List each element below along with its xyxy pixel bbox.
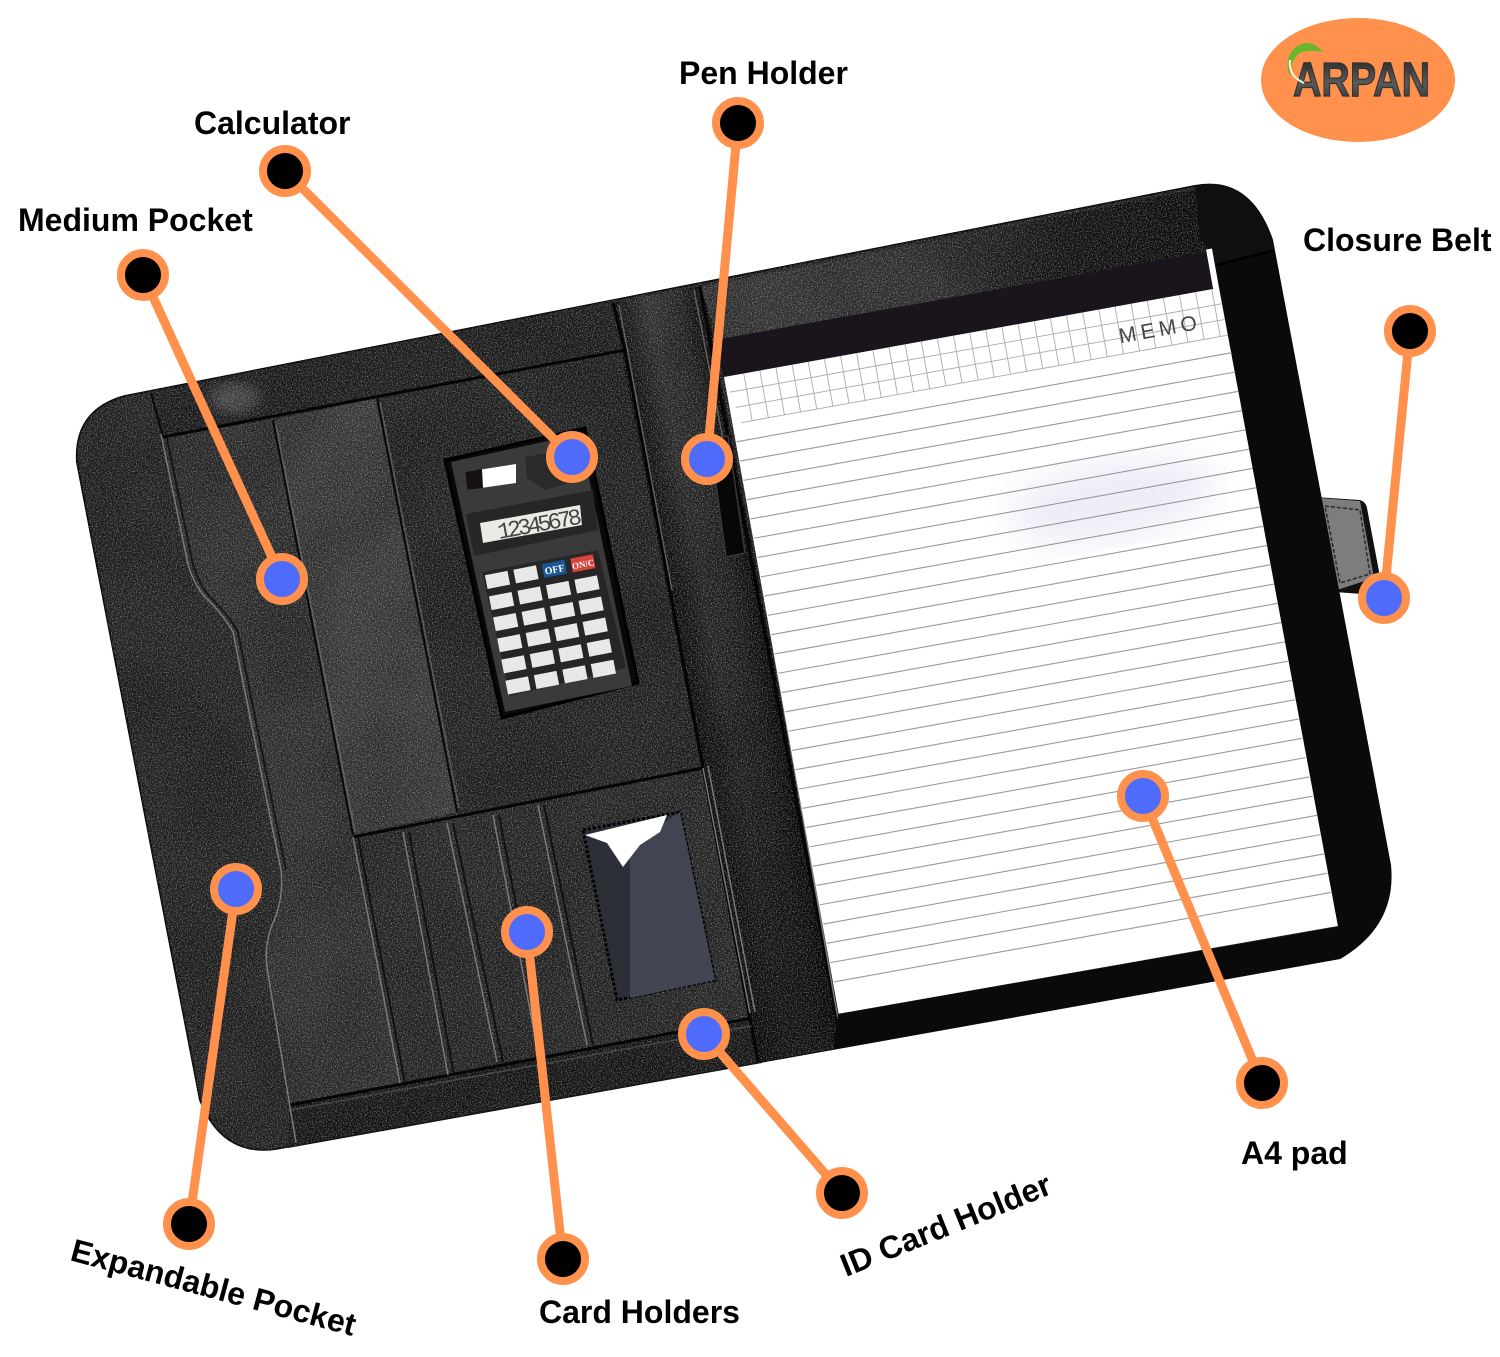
- logo wordmark: ARPAN: [1293, 54, 1430, 107]
- smudge: [1002, 442, 1222, 558]
- closure belt tab: [1315, 497, 1381, 594]
- callout: expandable pocket: [67, 867, 360, 1343]
- label: closure belt: Closure Belt: [1303, 222, 1492, 258]
- medium pocket panel: [273, 398, 457, 835]
- sheet: [724, 287, 1338, 1016]
- right page border: [830, 170, 1410, 1075]
- top band of right page: [700, 186, 1217, 346]
- label: pen holder: Pen Holder: [679, 55, 848, 91]
- off key: OFF: [544, 563, 566, 578]
- white sliver: [1206, 249, 1219, 289]
- lower strip: [288, 1018, 762, 1148]
- callout: medium pocket: [18, 202, 304, 601]
- label: expandable pocket: Expandable Pocket: [67, 1232, 360, 1343]
- display bezel: [466, 490, 598, 556]
- LCD display: 12345678: [496, 505, 583, 546]
- strip highlight: [209, 383, 261, 413]
- corner panel above belt seam: [1196, 185, 1210, 248]
- logo leaf: [1288, 43, 1323, 83]
- card holders panel: [353, 768, 752, 1083]
- off key: [542, 560, 567, 578]
- label: card holders: Card Holders: [539, 1294, 740, 1330]
- callout: card holders: [505, 910, 740, 1330]
- callout: closure belt: [1303, 222, 1492, 620]
- callout: pen holder: [679, 55, 848, 481]
- spine shading: [612, 285, 845, 1062]
- label: medium pocket: Medium Pocket: [18, 202, 253, 238]
- solar cell: [465, 464, 516, 490]
- callout: calculator: [194, 105, 594, 479]
- portfolio folder: [70, 170, 1410, 1170]
- calculator pocket panel: [377, 350, 703, 812]
- keypad: [485, 554, 616, 694]
- seams and stitching: [151, 287, 842, 1143]
- keypad background: [482, 550, 626, 696]
- callout: A4 pad: [1121, 774, 1348, 1171]
- ruled lines: [737, 352, 1331, 982]
- left page panels: [150, 285, 845, 1148]
- calculator: [445, 428, 638, 718]
- folder outer leather shell: [77, 185, 1391, 1150]
- pen holder: [710, 436, 745, 557]
- logo: [1261, 18, 1455, 142]
- A4 memo pad: [716, 248, 1338, 1016]
- calculator stitched surround: [445, 428, 638, 718]
- label: A4 pad: A4 pad: [1241, 1135, 1348, 1171]
- top binding strip: [150, 302, 625, 437]
- battery cover: [525, 450, 585, 490]
- calculator body: [451, 434, 632, 712]
- expandable pocket panel: [163, 420, 400, 1105]
- logo oval: [1261, 18, 1455, 142]
- on clear key: ON/C: [571, 557, 595, 571]
- memo word: MEMO: [1117, 311, 1203, 348]
- label: calculator: Calculator: [194, 105, 350, 141]
- leather spine: [612, 285, 845, 1062]
- callout: ID card holder: [682, 1012, 1056, 1283]
- label: ID card holder: ID Card Holder: [835, 1166, 1056, 1283]
- leather grain and mottling: [70, 170, 1230, 1170]
- ID card window: [583, 812, 715, 1000]
- black pad header: [716, 251, 1215, 377]
- memo grid: [727, 288, 1228, 424]
